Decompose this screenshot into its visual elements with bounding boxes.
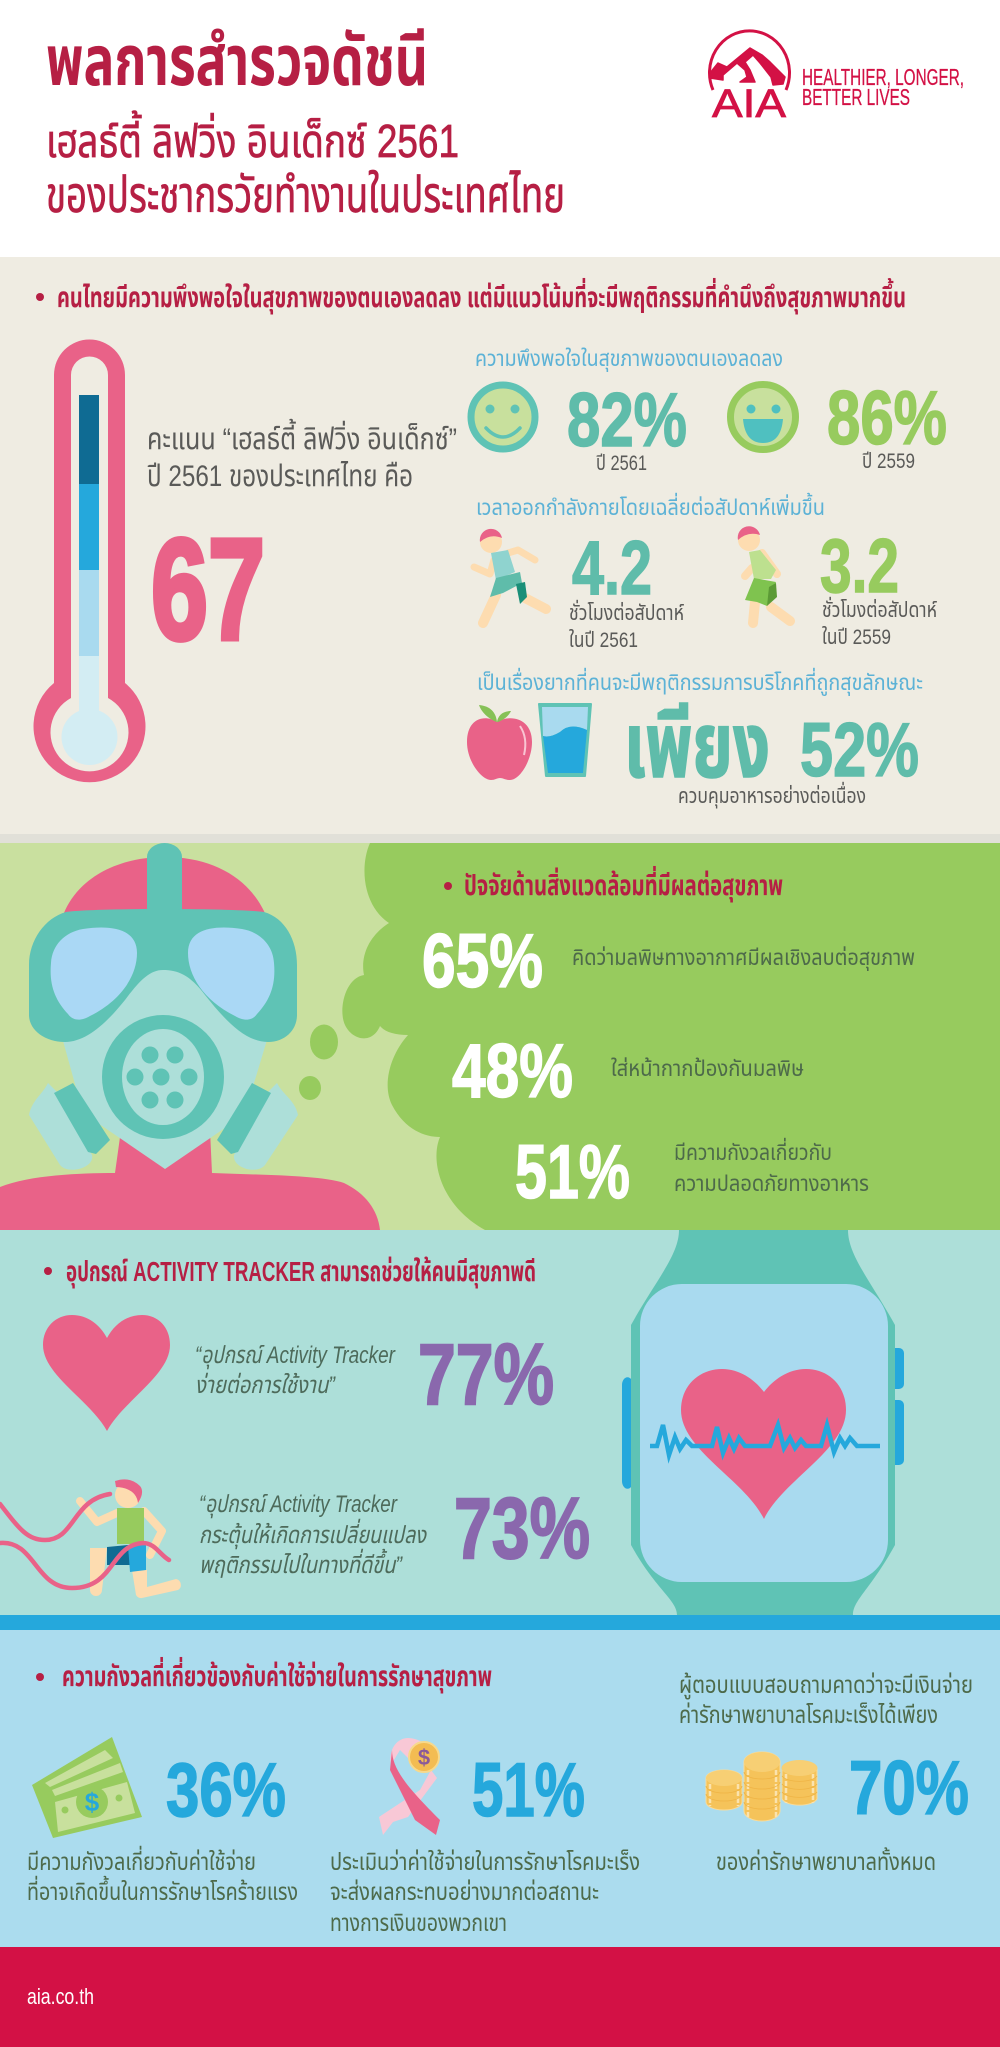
stat: only 52%: 52% xyxy=(800,708,919,793)
text: severe illness: มีความกังวลเกี่ยวกับค่าใช้จ่าย xyxy=(27,1845,256,1876)
stat: only 52%: เพียง xyxy=(624,695,770,797)
icon: runner with ribbon xyxy=(0,1479,181,1598)
panel: activity tracker xyxy=(0,1230,1000,1630)
section heading xyxy=(36,1656,492,1693)
label: hours 2561: ชั่วโมงต่อสัปดาห์ xyxy=(569,599,684,625)
section heading xyxy=(44,1256,536,1288)
icon: runner green xyxy=(738,526,790,623)
quote: easy to use: “อุปกรณ์ Activity Tracker xyxy=(195,1342,396,1370)
panel: environment xyxy=(0,843,1000,1230)
note: only covers: ค่ารักษาพยาบาลโรคมะเร็งได้เพียง xyxy=(679,1701,938,1729)
label: year 2561: ปี 2561 xyxy=(596,452,647,475)
subtitle line 2: ของประชากรวัยทำงานในประเทศไทย xyxy=(46,167,565,223)
quote: behaviour change xyxy=(199,1491,427,1579)
stat: 51%: 51% xyxy=(472,1748,585,1833)
text: cancer impact xyxy=(330,1848,640,1937)
score caption: ปี 2561 ของประเทศไทย คือ xyxy=(147,460,413,493)
icon: runner teal xyxy=(474,529,546,623)
stat: 3.2 hours: 3.2 xyxy=(820,524,899,609)
icon: cancer ribbon with coin: $ xyxy=(418,1745,430,1770)
icon: laughing face xyxy=(730,384,796,450)
icon: coin stacks xyxy=(706,1752,818,1821)
icon: heart xyxy=(43,1315,170,1431)
label: hours 2561 xyxy=(569,599,684,652)
icon: thermometer xyxy=(34,340,146,782)
illustration: person in gas mask xyxy=(0,843,380,1230)
text: cancer impact: ประเมินว่าค่าใช้จ่ายในการรักษาโรคมะเร็ง xyxy=(330,1848,640,1876)
section heading: อุปกรณ์ ACTIVITY TRACKER สามารถช่วยให้คนมีสุขภาพดี xyxy=(66,1256,536,1288)
stat: 36%: 36% xyxy=(166,1748,286,1833)
section heading xyxy=(444,865,783,902)
stat: 4.2 hours: 4.2 xyxy=(572,526,652,611)
speech cloud xyxy=(299,843,1000,1230)
label: control diet: ควบคุมอาหารอย่างต่อเนื่อง xyxy=(678,781,866,809)
stat: 82%: 82% xyxy=(567,378,687,463)
score caption: คะแนน “เฮลธ์ตี้ ลิฟวิ่ง อินเด็กซ์” xyxy=(147,418,457,456)
quote: easy to use: ง่ายต่อการใช้งาน” xyxy=(195,1372,336,1399)
stat: 70%: 70% xyxy=(849,1746,969,1831)
note: only covers xyxy=(679,1671,973,1729)
section heading: ปัจจัยด้านสิ่งแวดล้อมที่มีผลต่อสุขภาพ xyxy=(464,865,783,902)
icon: watch heart xyxy=(681,1369,846,1519)
logo tagline xyxy=(802,64,964,110)
label: hours 2559: ในปี 2559 xyxy=(822,626,891,649)
title: พลการสำรวจดัชนี xyxy=(46,22,428,100)
text: severe illness: ที่อาจเกิดขึ้นในการรักษาโรคร้ายแรง xyxy=(27,1875,298,1906)
label: year 2559: ปี 2559 xyxy=(862,450,915,473)
stat text: food safety: มีความกังวลเกี่ยวกับ xyxy=(674,1137,832,1165)
stat text: food safety xyxy=(674,1137,869,1196)
label: hours 2561: ในปี 2561 xyxy=(569,629,638,652)
icon: apple xyxy=(467,705,532,780)
heading: satisfaction: ความพึงพอใจในสุขภาพของตนเองลดลง xyxy=(475,346,783,372)
text: total treatment cost: ของค่ารักษาพยาบาลทั้งหมด xyxy=(716,1846,936,1876)
icon: glass of water xyxy=(539,704,591,776)
stat: 65%: 65% xyxy=(422,919,543,1004)
section heading: ความกังวลที่เกี่ยวข้องกับค่าใช้จ่ายในการรักษาสุขภาพ xyxy=(62,1656,492,1693)
panel: self-rated health and behaviour xyxy=(0,257,1000,843)
stat: 51%: 51% xyxy=(515,1130,630,1215)
stat: 48%: 48% xyxy=(452,1029,573,1114)
stat: 86%: 86% xyxy=(827,376,947,461)
score caption xyxy=(147,418,457,493)
icon: smile face xyxy=(471,385,535,449)
icon: banknotes xyxy=(32,1737,142,1838)
heading: consumption: เป็นเรื่องยากที่คนจะมีพฤติกรรมการบริโภคที่ถูกสุขลักษณะ xyxy=(477,667,923,696)
stat text: mask: ใส่หน้ากากป้องกันมลพิษ xyxy=(611,1056,804,1081)
stat text: air pollution: คิดว่ามลพิษทางอากาศมีผลเชิงลบต่อสุขภาพ xyxy=(572,945,915,971)
heading: exercise: เวลาออกกำลังกายโดยเฉลี่ยต่อสัปดาห์เพิ่มขึ้น xyxy=(476,492,825,520)
quote: behaviour change: พฤติกรรมไปในทางที่ดีขึ้น” xyxy=(199,1548,403,1579)
quote: behaviour change: “อุปกรณ์ Activity Tracker xyxy=(199,1491,398,1519)
text: cancer impact: จะส่งผลกระทบอย่างมากต่อสถานะ xyxy=(330,1878,599,1906)
logo tagline: BETTER LIVES xyxy=(802,84,910,110)
quote: behaviour change: กระตุ้นให้เกิดการเปลี่ยนแปลง xyxy=(199,1518,427,1550)
logo: AIA xyxy=(709,31,790,126)
stat text: food safety: ความปลอดภัยทางอาหาร xyxy=(674,1171,869,1196)
stat: 73%: 73% xyxy=(454,1481,590,1577)
icon: cancer ribbon with coin xyxy=(379,1738,440,1835)
quote: easy to use xyxy=(195,1342,396,1399)
icon: banknotes: $ xyxy=(85,1787,100,1817)
label: hours 2559 xyxy=(822,596,937,649)
text: severe illness xyxy=(27,1845,298,1906)
text: cancer impact: ทางการเงินของพวกเขา xyxy=(330,1910,507,1937)
heartbeat line xyxy=(650,1425,880,1455)
footer bar xyxy=(0,1947,1000,2047)
subtitle line 1: เฮลธ์ตี้ ลิฟวิ่ง อินเด็กซ์ 2561 xyxy=(46,110,459,167)
logo: AIA: AIA xyxy=(712,82,786,126)
panel: medical cost concerns xyxy=(0,1630,1000,1947)
website: aia.co.th xyxy=(27,1984,94,2009)
illustration: smart watch xyxy=(622,1230,904,1615)
label: hours 2559: ชั่วโมงต่อสัปดาห์ xyxy=(822,596,937,622)
score number: 67 xyxy=(151,509,265,670)
header xyxy=(0,0,1000,257)
stat: 77%: 77% xyxy=(418,1327,554,1423)
